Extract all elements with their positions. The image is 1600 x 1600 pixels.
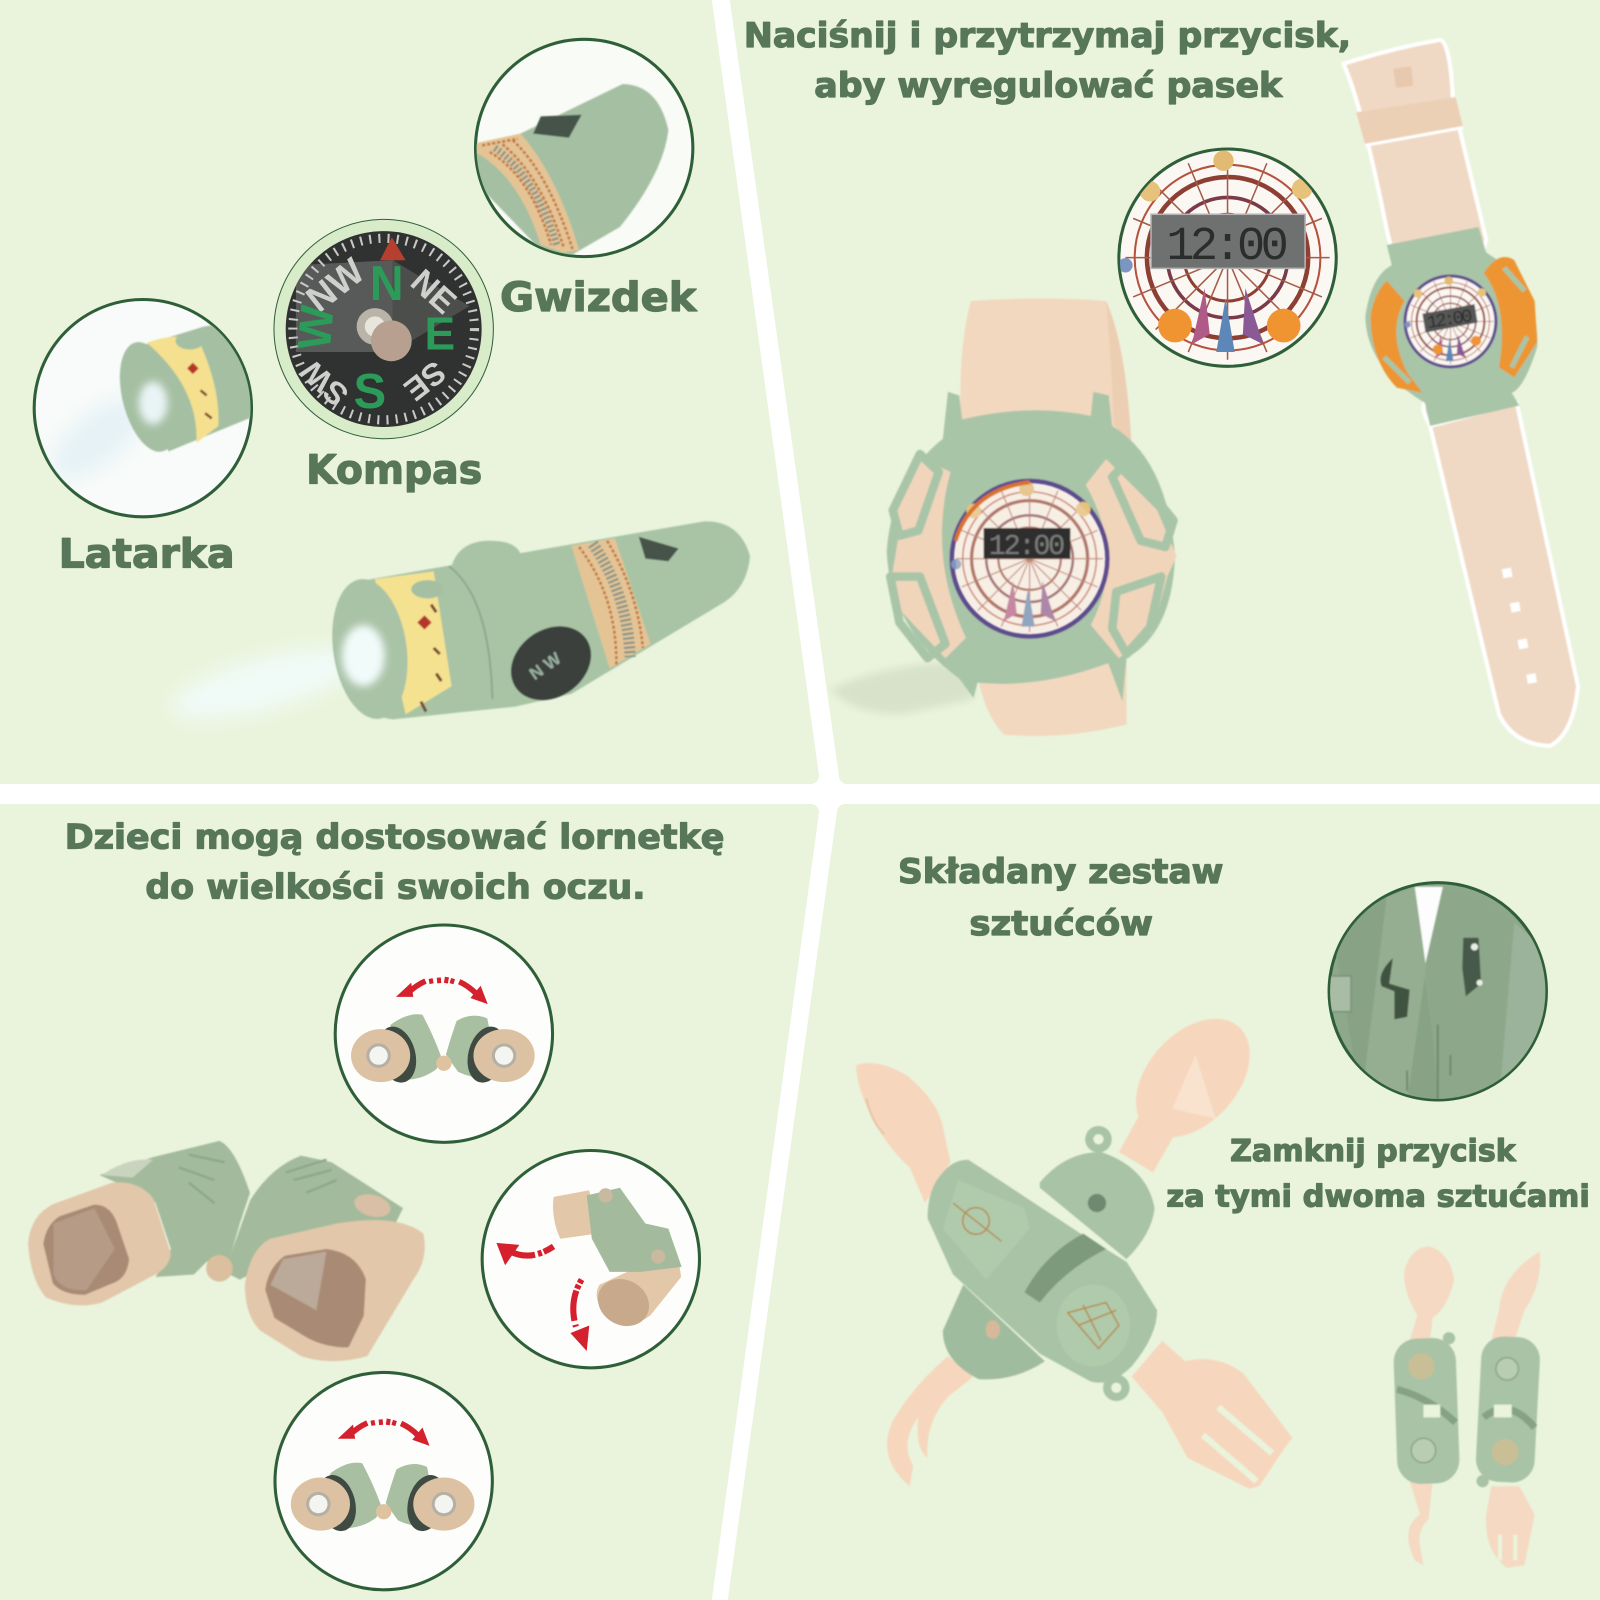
product: watch flat: 12:00 bbox=[1425, 306, 1474, 334]
detail circle: narrow eye distance bbox=[335, 925, 553, 1142]
detail circle: compass: N bbox=[370, 257, 404, 311]
panel: binoculars bbox=[0, 812, 811, 1600]
product: watch on wrist: 12:00 bbox=[989, 530, 1065, 563]
detail circle: compass: NE bbox=[403, 263, 463, 322]
heading: watch strap: aby wyregulować pasek bbox=[814, 66, 1284, 105]
detail circle: button close-up bbox=[1328, 883, 1550, 1101]
heading: cutlery set bbox=[898, 852, 1223, 943]
heading: cutlery set: Składany zestaw bbox=[898, 852, 1223, 891]
detail circle: compass: E bbox=[424, 307, 455, 359]
callout: close button: za tymi dwoma sztućami bbox=[1166, 1180, 1590, 1215]
heading: watch strap: Naciśnij i przytrzymaj przycisk, bbox=[744, 16, 1351, 55]
detail circle: dial bbox=[1118, 149, 1336, 366]
product: folded cutlery bbox=[1393, 1246, 1541, 1568]
panel: cutlery bbox=[733, 812, 1600, 1600]
label: Latarka: Latarka bbox=[59, 531, 235, 577]
panel: watch bbox=[735, 0, 1600, 776]
product: flashlight whistle: N W bbox=[525, 648, 565, 684]
product: binoculars bbox=[28, 1141, 425, 1361]
detail circle: compass: SE bbox=[397, 354, 453, 408]
heading: binoculars bbox=[65, 817, 724, 906]
product: watch on wrist bbox=[831, 298, 1177, 736]
heading: watch strap bbox=[744, 16, 1351, 105]
heading: binoculars: Dzieci mogą dostosować lornetkę bbox=[65, 817, 724, 856]
panel: flashlight whistle compass bbox=[0, 0, 811, 776]
detail circle: compass: S bbox=[354, 365, 386, 419]
detail circle: compass: SW bbox=[293, 353, 355, 414]
callout: close button: Zamknij przycisk bbox=[1230, 1134, 1516, 1169]
detail circle: flashlight bbox=[34, 299, 255, 517]
heading: binoculars: do wielkości swoich oczu. bbox=[145, 867, 645, 906]
product: unfolded cutlery bbox=[856, 997, 1292, 1489]
detail circle: dial: 12:00 bbox=[1166, 221, 1289, 274]
detail circle: compass bbox=[274, 219, 493, 439]
heading: cutlery set: sztućców bbox=[969, 904, 1153, 943]
product: watch flat bbox=[1343, 40, 1578, 746]
label: Kompas: Kompas bbox=[306, 448, 482, 494]
detail circle: compass: W bbox=[288, 303, 344, 352]
product: flashlight whistle bbox=[165, 521, 750, 733]
detail circle: wide eye distance bbox=[275, 1372, 492, 1590]
label: Gwizdek: Gwizdek bbox=[500, 275, 698, 321]
detail circle: whistle bbox=[472, 39, 693, 257]
callout: close button bbox=[1166, 1134, 1590, 1215]
detail circle: folding bbox=[482, 1151, 699, 1368]
detail circle: compass: NW bbox=[298, 250, 372, 320]
